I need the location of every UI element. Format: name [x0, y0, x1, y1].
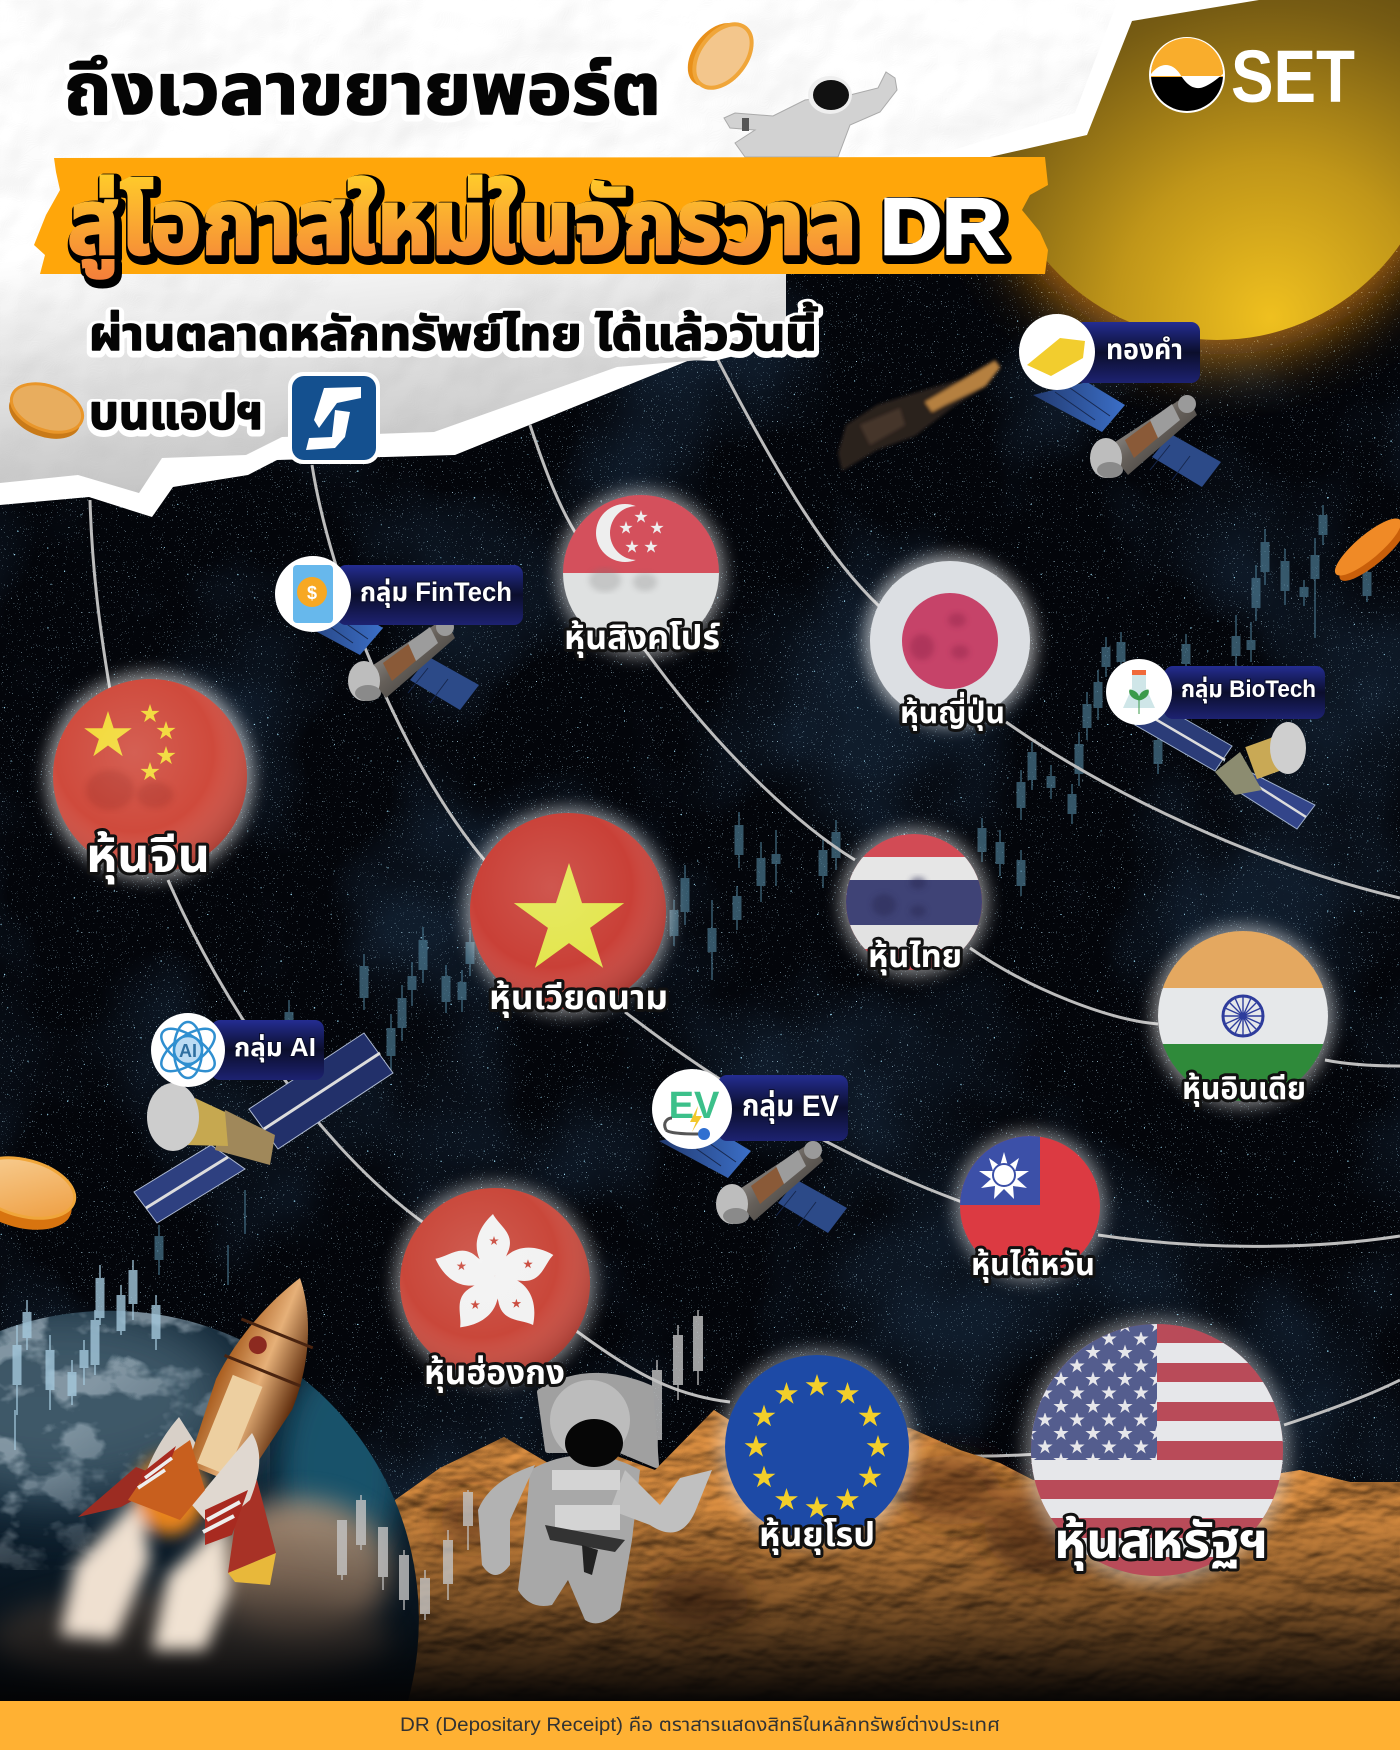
- label: Singapore: หุ้นสิงคโปร์: [564, 619, 720, 658]
- coins: [0, 511, 1400, 1240]
- title line 2: DR: [880, 182, 1004, 271]
- planet: Taiwan: [954, 1130, 1106, 1282]
- badge: AI: [151, 1013, 324, 1087]
- title line 2: สู่โอกาสใหม่ในจักรวาล: [67, 172, 857, 279]
- planet: Europe: [719, 1349, 915, 1545]
- label: Europe: หุ้นยุโรป: [759, 1516, 875, 1555]
- satellite: EV: [659, 1128, 847, 1233]
- footer bar: [0, 1701, 1400, 1750]
- icon: gold bar: [1027, 338, 1085, 376]
- badge: BioTech: กลุ่ม BioTech: [1181, 675, 1316, 704]
- label: Thailand: หุ้นไทย: [868, 938, 962, 975]
- title line 2: DR: [883, 186, 1007, 275]
- badge: FinTech: กลุ่ม FinTech: [360, 577, 512, 608]
- badge: BioTech: [1106, 659, 1325, 725]
- icon: EV plug: EV: [669, 1085, 720, 1127]
- title line 2: สู่โอกาสใหม่ในจักรวาล: [70, 176, 860, 283]
- white sun: [979, 1152, 1029, 1199]
- satellite: AI: [134, 1033, 393, 1223]
- smoke plume: [60, 1455, 230, 1650]
- app icon: [288, 372, 380, 464]
- coin: left: [2, 375, 89, 448]
- planet: India: [1150, 925, 1340, 1107]
- subtitle line: ผ่านตลาดหลักทรัพย์ไทย ได้แล้ววันนี้: [89, 304, 818, 362]
- title line 1: ถึงเวลาขยายพอร์ต: [64, 52, 661, 132]
- planet: Hong Kong: [394, 1182, 596, 1384]
- badge: EV: กลุ่ม EV: [742, 1090, 839, 1124]
- astronaut large: [478, 1376, 712, 1623]
- icon: coin phone: [293, 565, 333, 623]
- red fins: [78, 1467, 170, 1517]
- orange banner: [34, 157, 1048, 274]
- sun: [979, 0, 1400, 355]
- subtitle line: ผ่านตลาดหลักทรัพย์ไทย ได้แล้ววันนี้: [89, 302, 818, 360]
- coin: right: [1328, 511, 1400, 589]
- planet: USA: [1024, 1317, 1290, 1583]
- planet: China: [46, 672, 254, 880]
- planet: Japan: [864, 555, 1036, 727]
- label: Taiwan: หุ้นไต้หวัน: [971, 1247, 1095, 1283]
- icon: atom AI: AI: [179, 1041, 197, 1061]
- badge: gold: ทองคำ: [1106, 334, 1183, 365]
- label: Japan: หุ้นญี่ปุ่น: [900, 691, 1005, 731]
- earth: [0, 1300, 419, 1701]
- badge: FinTech: [275, 556, 523, 632]
- mars terrain: [395, 1410, 1400, 1750]
- label: USA: หุ้นสหรัฐฯ: [1054, 1513, 1268, 1571]
- rocket body: [181, 1263, 339, 1493]
- bottom fade: [0, 1500, 1400, 1705]
- badge: gold: [1019, 314, 1200, 390]
- icon: EV plug: [665, 1085, 720, 1140]
- label: Vietnam: หุ้นเวียดนาม: [489, 979, 668, 1018]
- label: Hong Kong: หุ้นฮ่องกง: [424, 1354, 565, 1393]
- rocket: [60, 1263, 339, 1650]
- title line 1: ถึงเวลาขยายพอร์ต: [64, 50, 661, 130]
- torn paper header: [0, 0, 1259, 517]
- badge: AI: กลุ่ม AI: [234, 1032, 316, 1063]
- bauhinia flower: [430, 1214, 559, 1337]
- engine: [128, 1440, 205, 1520]
- planet: Vietnam: [464, 807, 672, 1015]
- gray candlesticks: [15, 1260, 698, 1620]
- label: China: หุ้นจีน: [86, 830, 210, 885]
- app line: บนแอปฯ: [89, 389, 263, 442]
- planet: Thailand: [840, 828, 990, 976]
- orbit lines: [90, 360, 1400, 1456]
- satellite: gold: [1033, 382, 1221, 487]
- coin: top: [676, 10, 763, 101]
- planet: Singapore: [557, 489, 725, 657]
- right booster: [192, 1433, 259, 1530]
- stock candlesticks: [159, 505, 1367, 1285]
- satellite: BioTech: [1135, 707, 1315, 829]
- logo: SET: SET: [1231, 35, 1355, 118]
- app line: บนแอปฯ: [89, 387, 263, 440]
- label: India: หุ้นอินเดีย: [1182, 1071, 1306, 1107]
- badge: EV: [652, 1069, 848, 1149]
- footer bar: DR (Depositary Receipt) คือ ตราสารแสดงสิทธิในหลักทรัพย์ต่างประเทศ: [400, 1713, 1000, 1736]
- satellite: FinTech: [291, 605, 479, 710]
- ashoka chakra: [1223, 996, 1263, 1036]
- coin: lower left: [0, 1147, 81, 1240]
- icon: atom AI: [155, 1021, 221, 1079]
- logo: SET: [1149, 35, 1355, 118]
- asteroid: [838, 359, 1001, 471]
- astronaut small: [724, 72, 897, 157]
- icon: flask: [1123, 670, 1155, 714]
- planet labels: [86, 619, 1306, 1571]
- left booster: [140, 1417, 200, 1510]
- icon: coin phone: $: [307, 583, 317, 603]
